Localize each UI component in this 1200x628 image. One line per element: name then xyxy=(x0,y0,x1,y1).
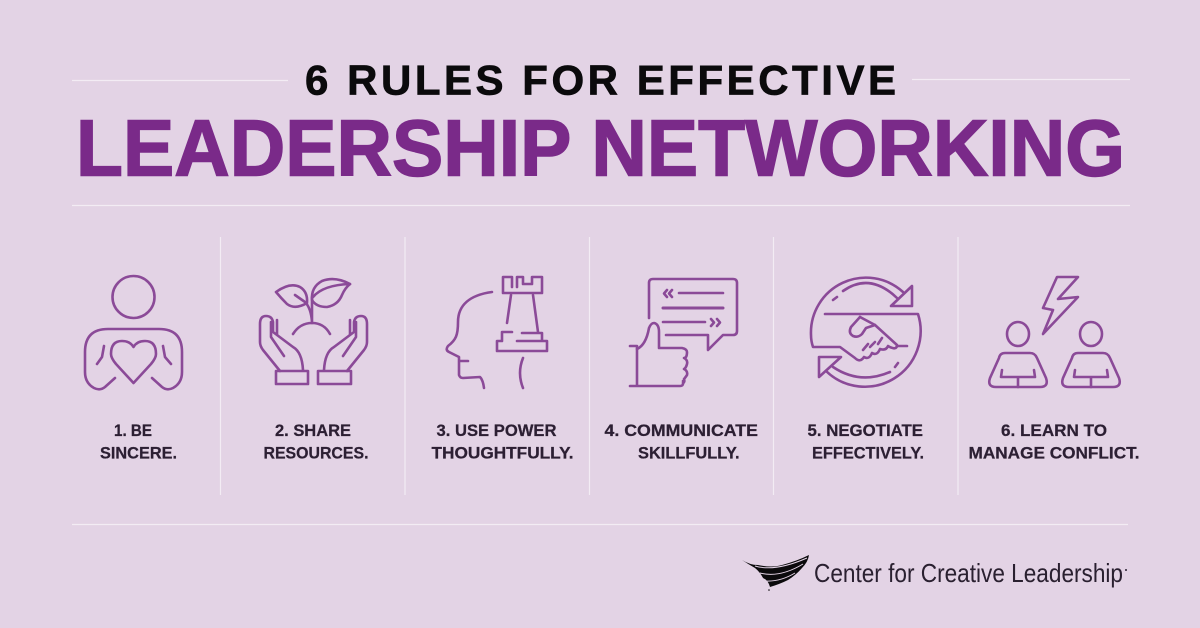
column 5: negotiate effectively xyxy=(808,278,924,462)
icon: handshake in circular arrows xyxy=(811,278,921,387)
label 4 xyxy=(604,422,758,462)
registered mark xyxy=(1125,569,1127,571)
label 5: 5. NEGOTIATE xyxy=(808,422,923,440)
label 1 xyxy=(100,422,177,462)
icon: speech bubble and thumbs up xyxy=(630,279,737,386)
icon: hands and seedling xyxy=(260,279,367,384)
label 1: 1. BE xyxy=(114,422,152,440)
icon: head and chess rook xyxy=(447,277,547,388)
label 6 xyxy=(968,422,1140,462)
label 2: 2. SHARE xyxy=(275,422,351,440)
title line 2: LEADERSHIP NETWORKING xyxy=(76,103,1125,192)
label 4: 4. COMMUNICATE xyxy=(604,422,758,440)
label 5 xyxy=(808,422,924,462)
title line 1: 6 RULES FOR EFFECTIVE xyxy=(305,56,896,104)
label 5: EFFECTIVELY. xyxy=(812,444,924,462)
logo: Center for Creative Leadership xyxy=(742,555,1127,591)
label 3 xyxy=(432,422,574,462)
label 6: MANAGE CONFLICT. xyxy=(968,444,1140,462)
logo mark: wing xyxy=(742,555,809,591)
column 3: use power thoughtfully xyxy=(432,277,574,462)
logo wordmark: Center for Creative Leadership xyxy=(814,558,1123,588)
label 1: SINCERE. xyxy=(100,444,177,462)
icon: two people and lightning bolt xyxy=(989,277,1120,387)
label 2: RESOURCES. xyxy=(264,444,368,462)
label 4: SKILLFULLY. xyxy=(638,444,740,462)
label 3: 3. USE POWER xyxy=(436,422,557,440)
column 4: communicate skillfully xyxy=(604,279,758,462)
label 2 xyxy=(264,422,368,462)
column 2: share resources xyxy=(260,279,368,462)
column 6: learn to manage conflict xyxy=(968,277,1140,462)
label 3: THOUGHTFULLY. xyxy=(432,444,574,462)
column 1: be sincere xyxy=(85,276,182,462)
icon: person holding heart xyxy=(85,276,182,389)
label 6: 6. LEARN TO xyxy=(1001,422,1107,440)
